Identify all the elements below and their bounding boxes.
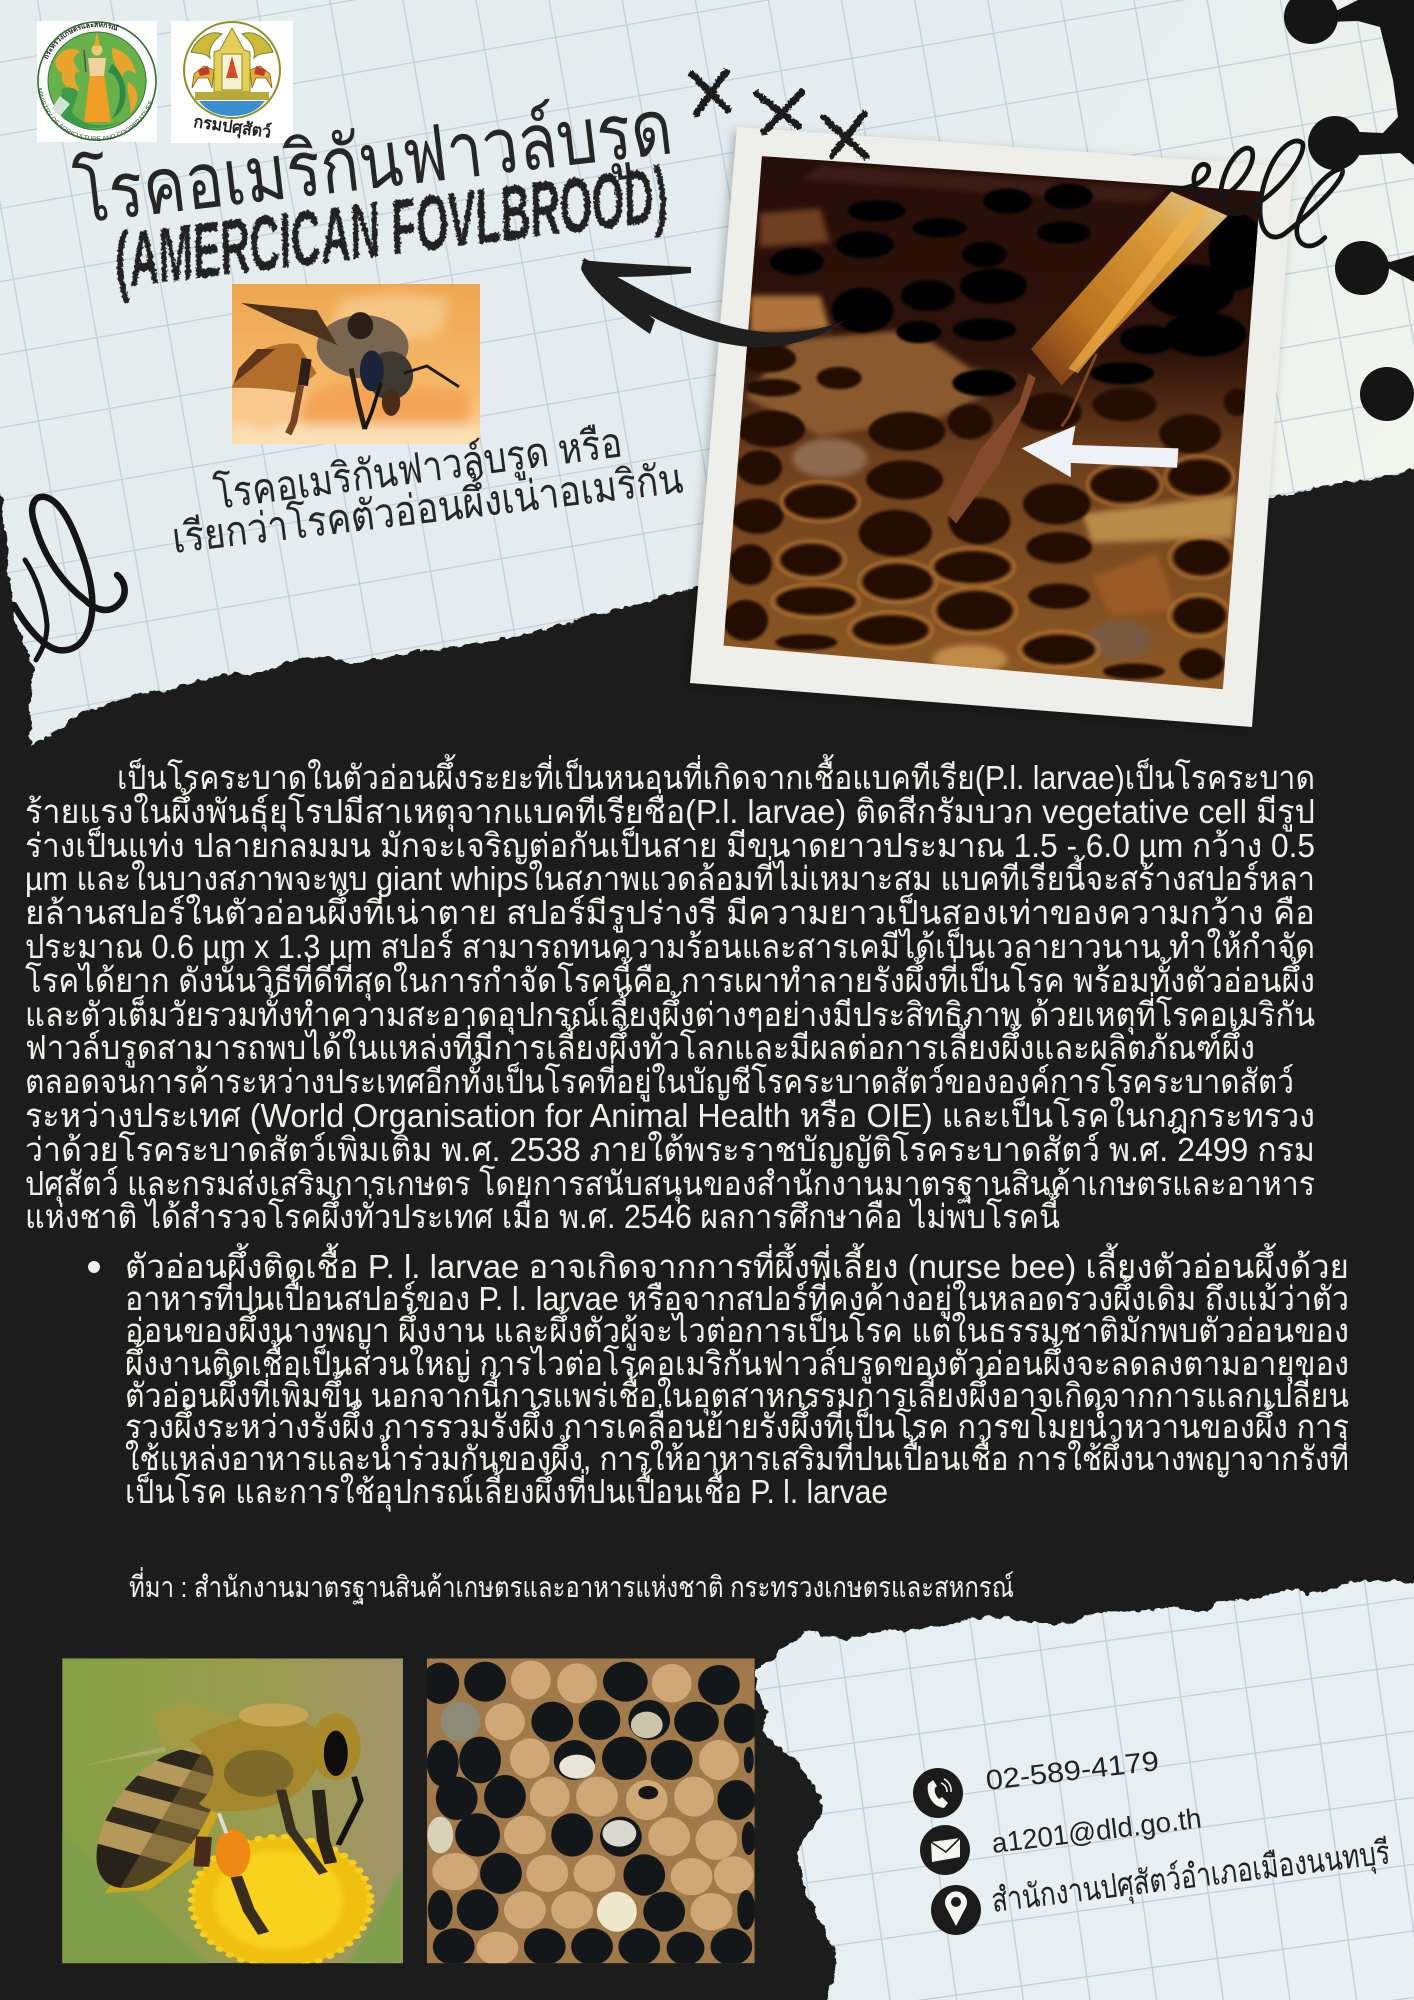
source line: ที่มา : สำนักงานมาตรฐานสินค้าเกษตรและอาหารแห่งชาติ กระทรวงเกษตรและสหกรณ์	[129, 1567, 1014, 1605]
title: Thai: โรคอเมริกันฟาวล์บรูด	[70, 82, 677, 243]
body text: main paragraph: µm และในบางสภาพจะพบ giant whipsในสภาพแวดล้อมที่ไม่เหมาะสม แบคทีเรียนี้จะสร้างสปอร์หลา	[25, 855, 1315, 897]
icon: phone	[913, 1768, 963, 1818]
photo: diseased brood comb	[421, 1658, 759, 1965]
logo: Ministry of Agriculture and Cooperatives: กระทรวงเกษตรและสหกรณ์	[44, 22, 119, 60]
body text: main paragraph: ร้ายแรงในผึ้งพันธุ์ยุโรปมีสาเหตุจากแบคทีเรียชื่อ(P.l. larvae) ติดสีกรัมบวก vegetative cell มีรูป	[25, 788, 1315, 832]
contact: email: a1201@dld.go.th	[990, 1802, 1203, 1859]
body text: main paragraph: เป็นโรคระบาดในตัวอ่อนผึ้งระยะที่เป็นหนอนที่เกิดจากเชื้อแบคทีเรีย(P.l. larvae)เป็นโรคระบาด	[117, 754, 1315, 796]
icon: location pin	[931, 1885, 981, 1935]
body text: main paragraph: โรคได้ยาก ดังนั้นวิธีที่ดีที่สุดในการกำจัดโรคนี้คือ การเผาทำลายรังผึ้งที่เป็นโรค พร้อมทั้งตัวอ่อนผึ้ง	[25, 957, 1315, 1001]
bullet paragraph	[88, 1243, 1349, 1512]
body text: main paragraph: ระหว่างประเทศ (World Organisation for Animal Health หรือ OIE) และเป็นโรคในกฎกระทรวง	[25, 1096, 1315, 1134]
logo: Department of Livestock Development	[171, 21, 293, 143]
bullet paragraph: ตัวอ่อนผึ้งติดเชื้อ P. l. larvae อาจเกิดจากการที่ผึ้งพี่เลี้ยง (nurse bee) เลี้ยงตัวอ่อนผึ้งด้วย	[125, 1243, 1349, 1285]
subtitle: โรคอเมริกันฟาวล์บรูด หรือ	[211, 417, 625, 520]
body text: main paragraph: ตลอดจนการค้าระหว่างประเทศอีกทั้งเป็นโรคที่อยู่ในบัญชีโรคระบาดสัตว์ขององค์การโรคระบาดสัตว์	[25, 1058, 1294, 1102]
bullet paragraph: ผึ้งงานติดเชื้อเป็นส่วนใหญ่ การไวต่อโรคอเมริกันฟาวล์บรูดของตัวอ่อนผึ้งจะลดลงตามอายุของ	[125, 1340, 1349, 1384]
contact: email	[920, 1802, 1203, 1875]
logo: Ministry of Agriculture and Cooperatives: MINISTRY OF AGRICULTURE AND COOPERATIVES	[38, 88, 153, 142]
bullet paragraph: อาหารที่ปนเปื้อนสปอร์ของ P. l. larvae หรือจากสปอร์ที่คงค้างอยู่ในหลอดรวงผึ้งเดิม ถึงแม้ว่าตัว	[125, 1275, 1349, 1319]
body text: main paragraph: และตัวเต็มวัยรวมทั้งทำความสะอาดอุปกรณ์เลี้ยงผึ้งต่างๆอย่างมีประสิทธิภาพ ด้วยเหตุที่โรคอเมริกัน	[25, 991, 1315, 1035]
icon: envelope	[920, 1825, 970, 1875]
title: English brush: (AMERCICAN FOVLBROOD)	[109, 150, 672, 305]
body text: main paragraph: ประมาณ 0.6 µm x 1.3 µm สปอร์ สามารถทนความร้อนและสารเคมีได้เป็นเวลายาวนาน ทำให้กำจัด	[25, 927, 1315, 965]
body text: main paragraph: ร่างเป็นแท่ง ปลายกลมมน มักจะเจริญต่อกันเป็นสาย มีขนาดยาวประมาณ 1.5 - 6.0 µm กว้าง 0.5	[25, 826, 1315, 864]
icon: white arrow on photo	[1022, 426, 1178, 477]
body text: main paragraph: ปศุสัตว์ และกรมส่งเสริมการเกษตร โดยการสนับสนุนของสำนักงานมาตรฐานสินค้าเกษตรและอาหาร	[25, 1165, 1315, 1204]
ink splatter: top right	[1284, 0, 1414, 421]
photo frame: polaroid	[690, 127, 1293, 727]
body text: main paragraph: ว่าด้วยโรคระบาดสัตว์เพิ่มเติม พ.ศ. 2538 ภายใต้พระราชบัญญัติโรคระบาดสัตว์ พ.ศ. 2499 กรม	[25, 1127, 1315, 1168]
photo: comb with ropy larva test	[708, 145, 1279, 698]
black torn paper panel	[0, 462, 1414, 2000]
body text: main paragraph	[25, 754, 1315, 1235]
decorative brush crosses	[692, 72, 866, 156]
bullet paragraph: เป็นโรค และการใช้อุปกรณ์เลี้ยงผึ้งที่ปนเปื้อนเชื้อ P. l. larvae	[125, 1468, 888, 1512]
logo: Ministry of Agriculture and Cooperatives	[37, 21, 157, 142]
arrow: black curved	[581, 258, 846, 347]
decorative scribble: right	[1171, 141, 1343, 246]
photo: honey bee on yellow flower	[39, 1658, 403, 1967]
photo: bee on comb (top)	[227, 284, 480, 445]
body text: main paragraph: ฟาวล์บรูดสามารถพบได้ในแหล่งที่มีการเลี้ยงผึ้งทั่วโลกและมีผลต่อการเลี้ยงผึ้งและผลิตภัณฑ์ผึ้ง	[25, 1024, 1255, 1068]
body text: main paragraph: แห่งชาติ ได้สำรวจโรคผึ้งทั่วประเทศ เมื่อ พ.ศ. 2546 ผลการศึกษาคือ ไม่พบโรคนี้	[25, 1193, 1061, 1235]
body text: main paragraph: ยล้านสปอร์ในตัวอ่อนผึ้งที่เน่าตาย สปอร์มีรูปร่างรี มีความยาวเป็นสองเท่าของความกว้าง คือ	[25, 889, 1315, 933]
logo: Department of Livestock Development: กรมปศุสัตว์	[192, 111, 272, 143]
bullet paragraph: รวงผึ้งระหว่างรังผึ้ง การรวมรังผึ้ง การเคลื่อนย้ายรังผึ้งที่เป็นโรค การขโมยน้ำหวานของผึ้ง การ	[125, 1403, 1349, 1445]
decorative scribble: left	[14, 497, 125, 660]
contact: phone: 02-589-4179	[984, 1745, 1161, 1796]
subtitle: เรียกว่าโรคตัวอ่อนผึ้งเน่าอเมริกัน	[169, 447, 685, 562]
contact: phone	[913, 1745, 1161, 1818]
contact: address	[931, 1833, 1392, 1935]
bullet paragraph: อ่อนของผึ้งนางพญา ผึ้งงาน และผึ้งตัวผู้จะไวต่อการเป็นโรค แต่ในธรรมชาติมักพบตัวอ่อนของ	[125, 1307, 1349, 1351]
